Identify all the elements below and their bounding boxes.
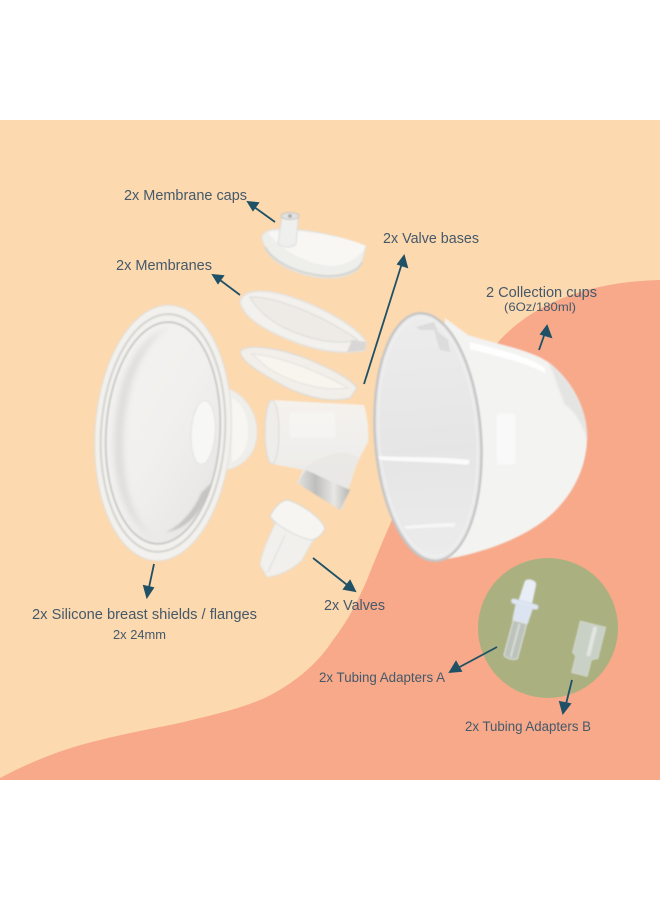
part: valve [260, 500, 325, 577]
green circle behind adapters [478, 558, 618, 698]
part: connector body [264, 400, 368, 510]
background shape: salmon wave [0, 280, 660, 780]
part: tubing adapter B [568, 621, 606, 678]
arrow: breast shields [144, 564, 154, 597]
label: membranes: 2x Membranes [116, 258, 212, 274]
label: collection cups: 2 Collection cups [486, 285, 597, 301]
label: membrane caps: 2x Membrane caps [124, 188, 247, 204]
label: tubing adapters B: 2x Tubing Adapters B [465, 719, 591, 734]
arrow: tubing adapters A [450, 647, 497, 672]
sub-part: connector neck [297, 470, 350, 510]
label: valve bases: 2x Valve bases [383, 231, 479, 247]
part: collection cup [366, 310, 587, 564]
label: tubing adapters A: 2x Tubing Adapters A [319, 670, 445, 685]
part: silicone breast shield [87, 301, 257, 565]
label: valves: 2x Valves [324, 598, 385, 614]
background panel: peach [0, 120, 660, 780]
part: membrane [240, 291, 366, 352]
arrow: membranes [213, 275, 240, 295]
part: valve base [240, 347, 357, 400]
arrow: tubing adapters B [560, 680, 572, 713]
part: tubing adapter A [497, 576, 545, 663]
arrow: collection cups [539, 326, 551, 350]
label: cup volume: (6Oz/180ml) [504, 300, 576, 314]
label: shield size: 2x 24mm [113, 628, 166, 642]
arrow: valve bases [364, 256, 407, 384]
label: breast shields: 2x Silicone breast shields / flanges [32, 607, 257, 623]
arrow: membrane caps [248, 202, 275, 222]
arrow: valves [313, 558, 355, 591]
part: membrane cap [262, 212, 366, 278]
